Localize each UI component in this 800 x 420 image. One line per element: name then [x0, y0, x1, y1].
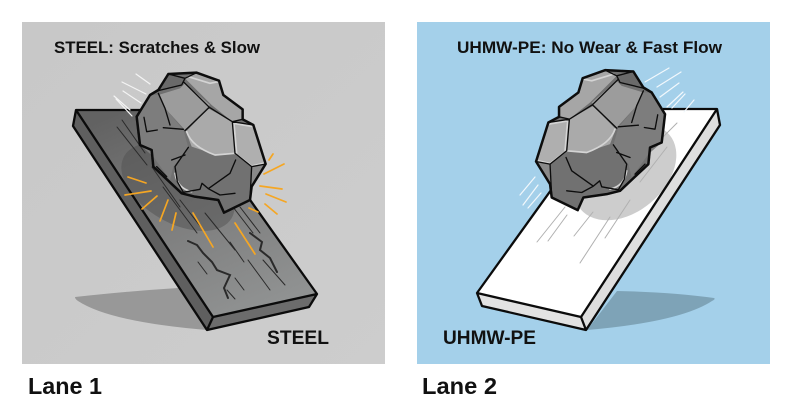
- rock: [536, 70, 665, 210]
- rock shadow on UHMW-PE: [580, 130, 676, 220]
- panel: UHMW-PE lane: [417, 22, 770, 364]
- panel: steel lane: [22, 22, 385, 364]
- UHMW-PE plate: [477, 104, 720, 330]
- speed streaks on UHMW-PE: [537, 123, 677, 263]
- caption: lane 1: Lane 1: [28, 373, 102, 399]
- steel plate: [73, 110, 317, 330]
- rock shadow on steel: [122, 146, 234, 231]
- caption: lane 2: Lane 2: [422, 373, 497, 399]
- motion lines: [520, 68, 694, 208]
- panel title: steel: STEEL: Scratches & Slow: [54, 38, 261, 57]
- scratches and cracks on steel: [117, 120, 285, 299]
- cast shadow of steel plate: [75, 288, 207, 330]
- rock: [137, 73, 266, 213]
- panel title: UHMW-PE: UHMW-PE: No Wear & Fast Flow: [457, 38, 723, 57]
- material label: UHMW-PE: UHMW-PE: [443, 328, 536, 349]
- material label: steel: STEEL: [267, 328, 329, 349]
- motion lines: [114, 74, 150, 116]
- orange impact sparks: [125, 154, 286, 254]
- cast shadow of UHMW-PE plate: [587, 291, 715, 330]
